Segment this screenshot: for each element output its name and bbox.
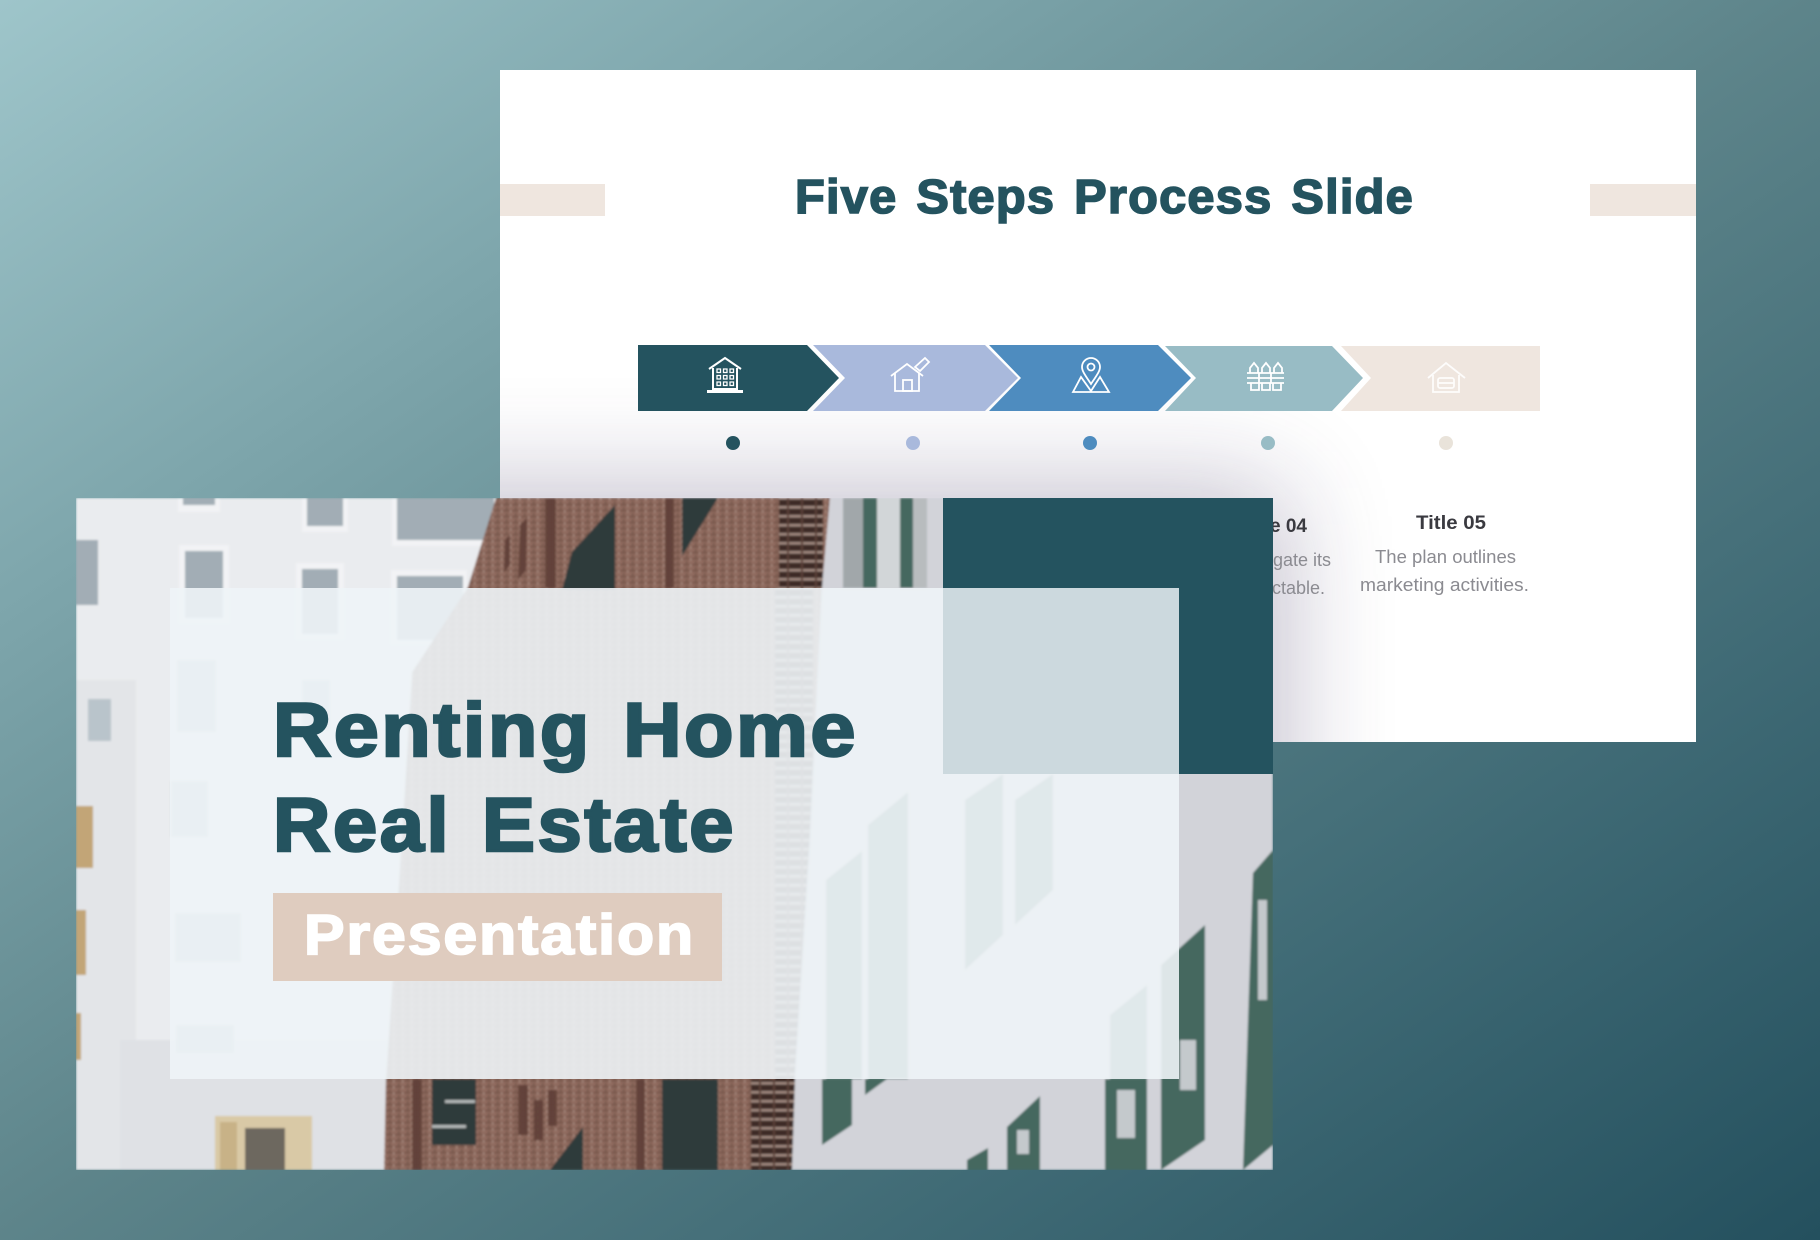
icon: map pin: [1073, 358, 1109, 392]
stone column and upper window: [842, 498, 864, 588]
white building, left: [76, 498, 482, 1042]
light square over teal: [943, 588, 1179, 774]
icon: garage: [1428, 363, 1465, 392]
text block: title 04: predictable.: [1232, 578, 1325, 598]
chevron step 5: [1341, 346, 1540, 411]
icon: apartment building: [707, 358, 743, 392]
text block: title 04: Title 04: [1242, 516, 1307, 537]
text block: title 04: [1221, 516, 1331, 598]
window frames: [178, 498, 496, 644]
heading: five steps process slide: Five Steps Process Slide: [795, 171, 1414, 224]
chevron step 3: [989, 345, 1191, 411]
panel: renting home cover slide: [76, 498, 1273, 1170]
icon: house with brush: [891, 358, 929, 391]
beige accent bar right: [1590, 184, 1696, 216]
chevron step 2: [813, 345, 1018, 411]
tag: presentation: [273, 893, 722, 981]
text block: title 05: The plan outlines: [1375, 547, 1516, 567]
step dots: [726, 436, 1453, 450]
beige accent bar left: [500, 184, 605, 216]
panel: five steps process slide: [500, 70, 1696, 742]
soft shadow cast by front slide: [500, 426, 1348, 742]
right white-grey building: [792, 498, 1273, 1170]
building photo: [76, 498, 1273, 1170]
chevron step 1: [638, 345, 839, 411]
icon: picket fence: [1247, 363, 1284, 390]
green windows lower right: [822, 850, 1273, 1170]
heading: real estate: Real Estate: [273, 783, 736, 868]
lower tan window: [215, 1116, 312, 1170]
text block: title 04: Investigate its: [1221, 550, 1331, 570]
tag: presentation: Presentation: [304, 903, 695, 967]
chevron step 4: [1165, 346, 1363, 411]
heading: renting home: Renting Home: [273, 688, 858, 773]
pale windows seen through veil: [826, 774, 1180, 1079]
brick building, centre: [384, 498, 830, 1170]
dark teal square: [943, 498, 1273, 774]
text block: title 05: [1360, 513, 1529, 595]
translucent white panel: [170, 588, 1179, 1079]
text block: title 05: Title 05: [1416, 513, 1486, 534]
text block: title 05: marketing activities.: [1360, 575, 1529, 595]
